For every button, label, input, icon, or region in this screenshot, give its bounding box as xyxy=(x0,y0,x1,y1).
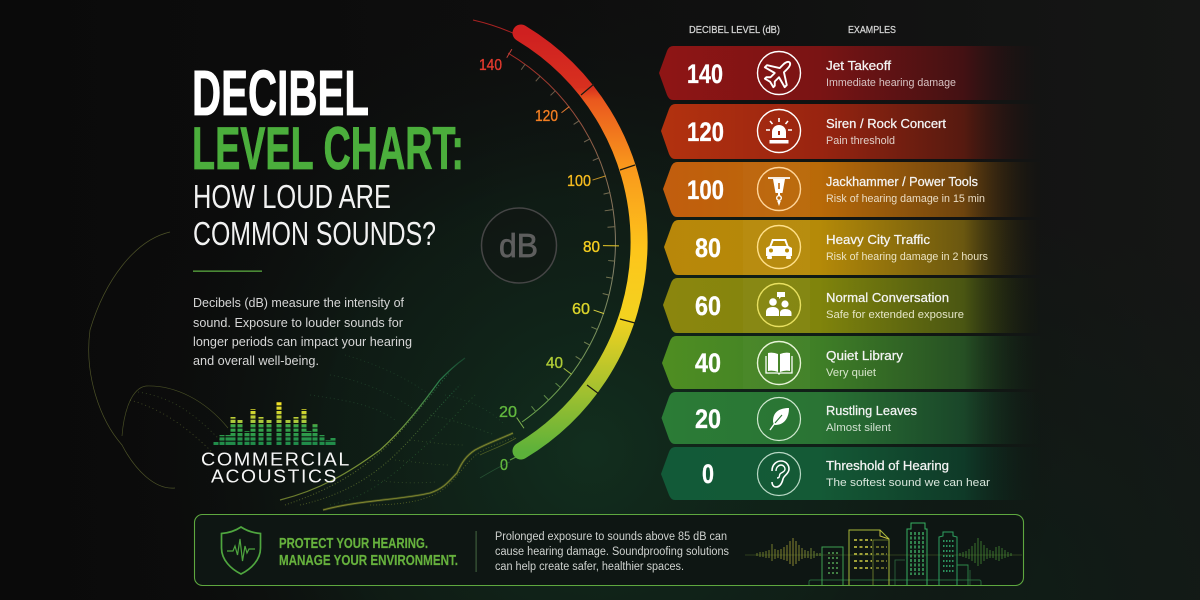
gauge top hairline xyxy=(473,20,515,34)
gauge scale labels: 100 xyxy=(567,173,591,190)
table header: EXAMPLES xyxy=(848,25,896,36)
gauge centre badge: dB xyxy=(499,227,538,264)
row: 100 dB xyxy=(663,162,1040,217)
row: 140 dB: 140 xyxy=(687,59,723,89)
subtitle line 2: COMMON SOUNDS? xyxy=(193,215,436,252)
row: 0 dB: Threshold of Hearing xyxy=(826,459,949,473)
row: 140 dB: Jet Takeoff xyxy=(826,59,892,73)
icon: leaf xyxy=(758,398,800,440)
gauge inner arc xyxy=(508,53,615,422)
gauge scale labels: 120 xyxy=(535,108,558,125)
row: 100 dB: 100 xyxy=(687,175,724,205)
row: 80 dB: Risk of hearing damage in 2 hours xyxy=(826,251,988,263)
logo: Commercial Acoustics xyxy=(201,402,351,486)
row: 60 dB: Normal Conversation xyxy=(826,291,949,305)
row: 60 dB xyxy=(663,278,1040,333)
row: 0 dB xyxy=(661,447,1040,500)
gauge scale labels: 0 xyxy=(500,457,508,474)
subtitle line 1: HOW LOUD ARE xyxy=(193,178,391,215)
row: 80 dB: Heavy City Traffic xyxy=(826,233,930,247)
row: 100 dB: Risk of hearing damage in 15 min xyxy=(826,193,985,205)
row: 20 dB: Almost silent xyxy=(826,422,891,434)
row: 80 dB xyxy=(664,220,1040,275)
row: 120 dB: 120 xyxy=(687,117,724,147)
icon: open book xyxy=(758,342,800,384)
intro text: Decibels (dB) measure the intensity of xyxy=(193,296,405,310)
row: 120 dB: Pain threshold xyxy=(826,135,895,147)
table header: DECIBEL LEVEL (dB) xyxy=(689,25,780,36)
callout heading: PROTECT YOUR HEARING. xyxy=(279,536,428,552)
row: 100 dB: Jackhammer / Power Tools xyxy=(826,175,978,189)
gauge scale labels: 80 xyxy=(583,239,600,256)
callout text: cause hearing damage. Soundproofing solutions xyxy=(495,546,729,558)
gauge scale labels: 60 xyxy=(572,301,590,318)
icon: car xyxy=(758,226,800,268)
title line: Decibel: DECIBEL xyxy=(192,57,369,129)
gauge centre badge xyxy=(482,208,556,283)
row: 0 dB: 0 xyxy=(702,459,714,489)
row: 40 dB xyxy=(662,336,1040,389)
gauge scale labels xyxy=(479,57,600,474)
icon: jackhammer xyxy=(758,168,800,210)
logo wordmark: COMMERCIAL xyxy=(201,450,351,470)
row: 60 dB: Safe for extended exposure xyxy=(826,309,964,321)
callout heading: MANAGE YOUR ENVIRONMENT. xyxy=(279,553,458,569)
row: 140 dB: Immediate hearing damage xyxy=(826,77,956,89)
intro text xyxy=(193,296,412,368)
callout text xyxy=(495,531,729,573)
row: 80 dB: 80 xyxy=(695,233,721,263)
icon: ear xyxy=(758,452,800,496)
logo equalizer bars xyxy=(216,402,333,445)
gauge scale labels: 140 xyxy=(479,57,502,74)
title line: Level Chart: LEVEL CHART: xyxy=(192,115,464,182)
intro text: sound. Exposure to louder sounds for xyxy=(193,316,403,330)
icon: shield with pulse xyxy=(222,527,260,574)
illustration: sound wave and city skyline xyxy=(745,523,1022,585)
logo: Commercial Acoustics: ACOUSTICS xyxy=(211,466,338,486)
row: 20 dB: Rustling Leaves xyxy=(826,404,917,418)
row: 40 dB: Very quiet xyxy=(826,367,876,379)
row: 20 dB: 20 xyxy=(695,404,721,434)
intro text: longer periods can impact your hearing xyxy=(193,335,412,349)
row: 140 dB xyxy=(659,46,1040,100)
gauge xyxy=(473,20,639,474)
callout text: Prolonged exposure to sounds above 85 dB can xyxy=(495,531,727,543)
row: 120 dB xyxy=(661,104,1040,159)
callout heading xyxy=(279,536,458,569)
gauge segment dividers xyxy=(581,84,635,394)
table header xyxy=(689,25,896,36)
gauge ticks xyxy=(507,49,619,460)
row: 40 dB: 40 xyxy=(695,348,721,378)
gauge coloured arc xyxy=(521,33,639,451)
row: 60 dB: 60 xyxy=(695,291,721,321)
row: 20 dB xyxy=(662,392,1040,444)
row: 120 dB: Siren / Rock Concert xyxy=(826,117,947,131)
icon: conversation xyxy=(758,284,800,326)
panel: protect your hearing xyxy=(194,514,1024,586)
gauge scale labels: 20 xyxy=(499,404,517,421)
row: 0 dB: The softest sound we can hear xyxy=(826,477,990,489)
intro text: and overall well-being. xyxy=(193,354,319,368)
title xyxy=(192,57,464,252)
callout text: can help create safer, healthier spaces. xyxy=(495,561,684,573)
row: 40 dB: Quiet Library xyxy=(826,349,904,363)
gauge scale labels: 40 xyxy=(546,355,563,372)
decorative sound wave lines xyxy=(89,232,516,510)
icon: airplane xyxy=(758,52,800,94)
icon: siren xyxy=(758,110,800,152)
